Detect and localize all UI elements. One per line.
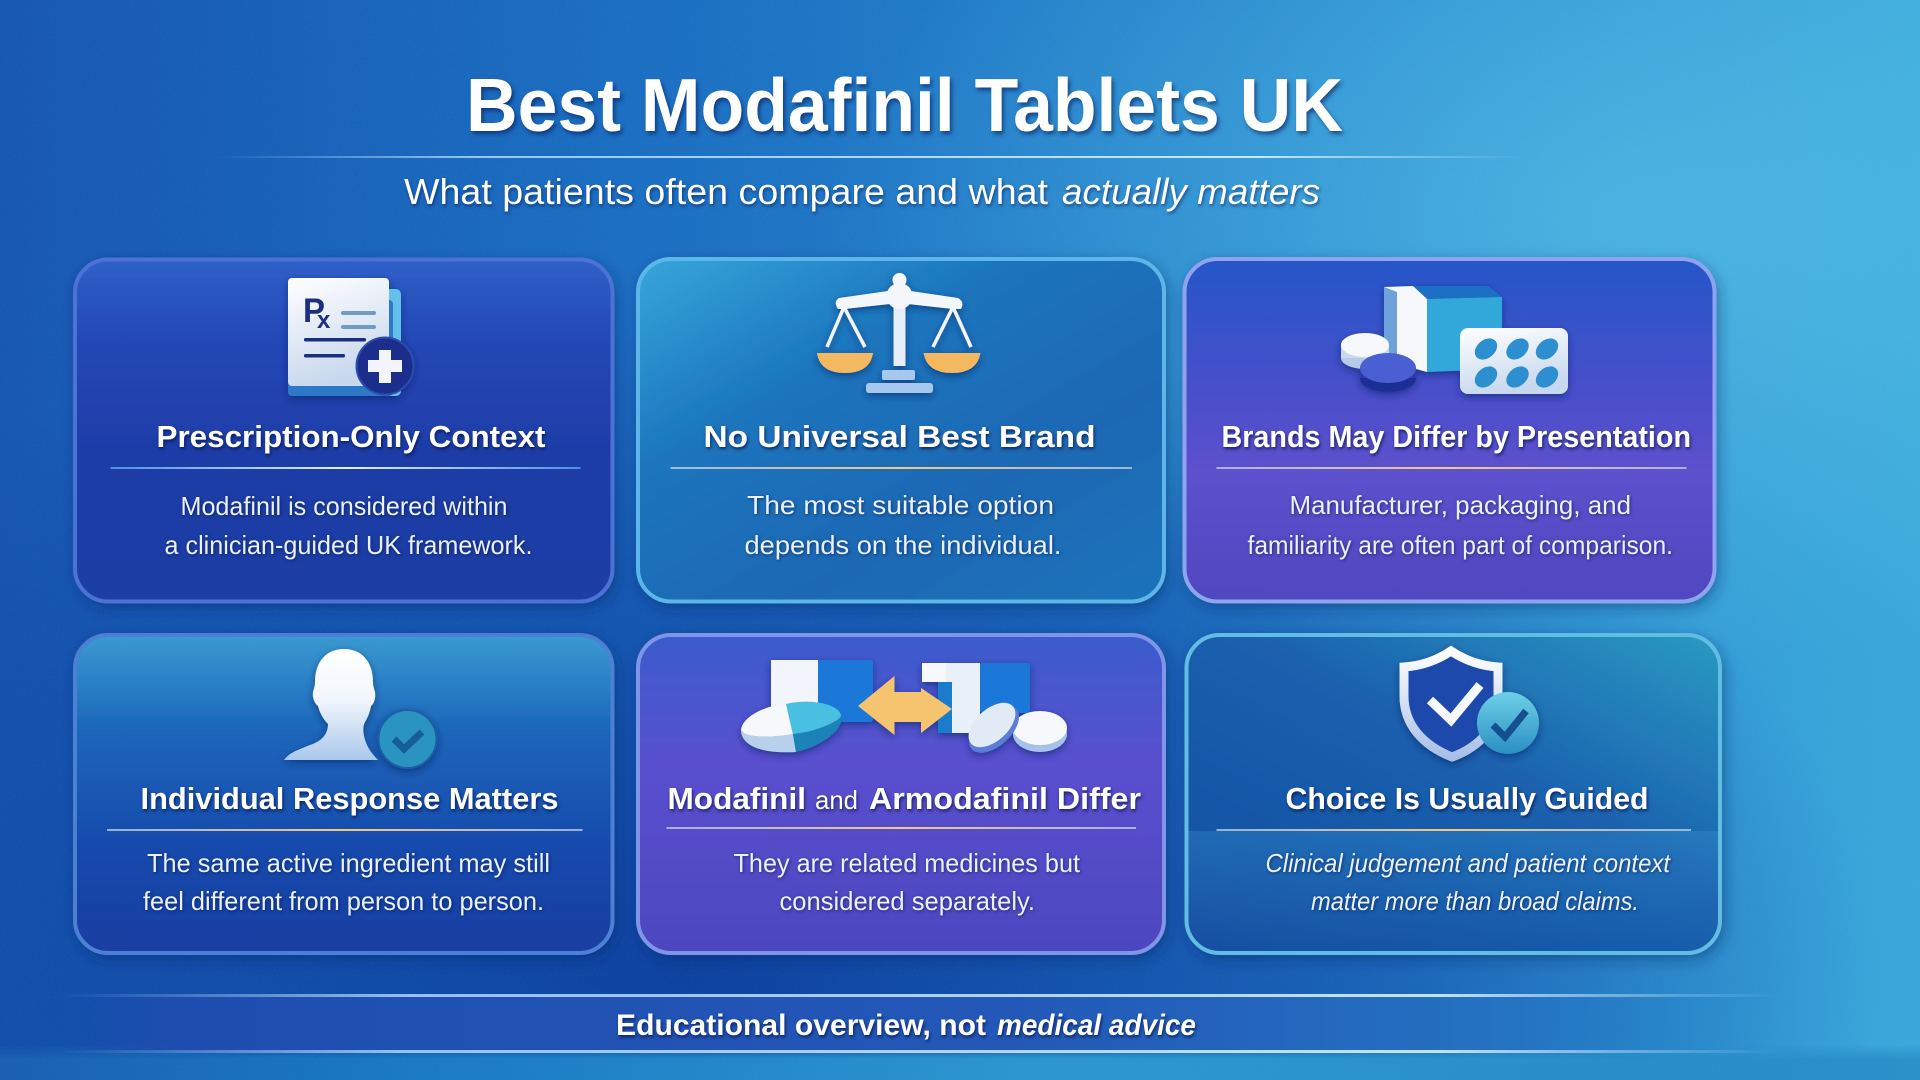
card background <box>1186 635 1720 953</box>
footer note: medical advice <box>997 1009 1196 1042</box>
panel: No Universal Best Brand <box>638 259 1164 602</box>
panel: Individual Response Matters <box>75 635 612 953</box>
body text: The most suitable option <box>747 490 1054 520</box>
icon: prescription document with plus: x <box>317 307 331 334</box>
body text <box>164 491 532 560</box>
heading: and <box>815 785 858 815</box>
card background <box>1184 259 1714 602</box>
heading: No Universal Best Brand <box>704 419 1096 454</box>
body text: a clinician-guided UK framework. <box>164 530 532 560</box>
body text <box>734 848 1081 916</box>
footer note <box>616 1009 1196 1042</box>
card background <box>638 259 1164 602</box>
body text: Modafinil is considered within <box>180 491 508 521</box>
icon: prescription document with plus <box>288 278 414 396</box>
heading: Modafinil <box>668 781 806 816</box>
panel: Brands May Differ by Presentation <box>1184 259 1714 602</box>
subtitle <box>404 171 1320 212</box>
heading: Prescription-Only Context <box>156 419 546 454</box>
icon: medicine boxes, tablets and blister pack <box>1341 286 1568 394</box>
subtitle: What patients often compare and what <box>404 171 1048 212</box>
heading: Brands May Differ by Presentation <box>1222 419 1691 454</box>
body text <box>1248 490 1673 560</box>
body text: Clinical judgement and patient context <box>1266 848 1672 878</box>
body text: considered separately. <box>780 886 1035 916</box>
heading: Armodafinil Differ <box>869 781 1141 816</box>
body text: matter more than broad claims. <box>1311 886 1639 916</box>
body text <box>143 848 550 916</box>
icon: medicine comparison with double arrow <box>741 660 1067 762</box>
panel: Prescription-Only Context <box>75 260 612 602</box>
body text: Manufacturer, packaging, and <box>1290 490 1631 520</box>
title: Best Modafinil Tablets UK <box>466 63 1343 147</box>
body text: depends on the individual. <box>744 530 1062 560</box>
body text: familiarity are often part of comparison. <box>1248 530 1673 560</box>
panel: Choice Is Usually Guided <box>1186 635 1720 953</box>
body text <box>744 490 1062 560</box>
panel: Modafinil and Armodafinil Differ <box>638 635 1164 953</box>
heading: Choice Is Usually Guided <box>1286 781 1648 816</box>
card background <box>75 260 612 602</box>
heading <box>668 781 1141 816</box>
card background <box>75 635 612 953</box>
body text <box>1266 848 1672 916</box>
footer band <box>60 994 1780 1053</box>
heading: Individual Response Matters <box>140 781 558 816</box>
icon: shield with check badge <box>1404 651 1539 757</box>
footer note: Educational overview, not <box>616 1009 986 1042</box>
body text: The same active ingredient may still <box>147 848 550 878</box>
icon: balance scale <box>817 273 980 393</box>
card background <box>638 635 1164 953</box>
body text: They are related medicines but <box>734 848 1081 878</box>
subtitle: actually matters <box>1062 171 1320 212</box>
body text: feel different from person to person. <box>143 886 544 916</box>
icon: prescription document with plus: P <box>303 292 325 330</box>
icon: person with check badge <box>284 649 436 768</box>
